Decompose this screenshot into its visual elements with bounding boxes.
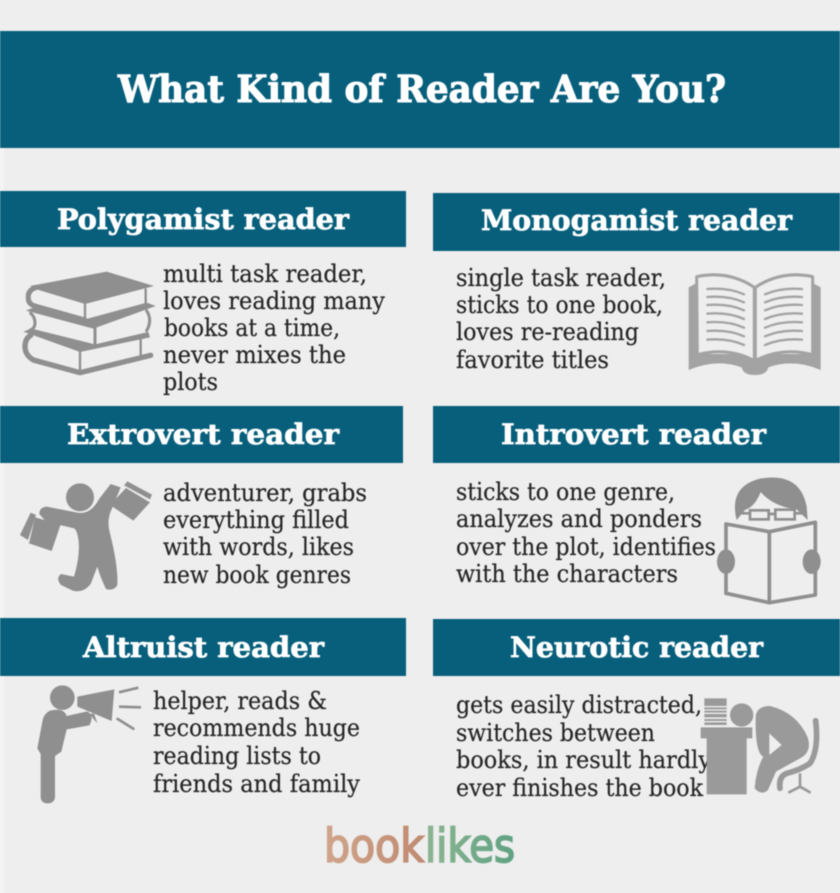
icon: person with megaphone	[37, 685, 141, 803]
text: neurotic description: ever finishes the book	[456, 773, 704, 802]
panel: extrovert reader	[0, 406, 403, 591]
text: monogamist description: single task reader,	[456, 263, 666, 292]
text: polygamist description	[163, 259, 385, 396]
text: polygamist description: multi task reader,	[163, 259, 367, 288]
text: monogamist description: favorite titles	[456, 345, 609, 374]
text: introvert description: sticks to one genre,	[456, 477, 675, 506]
text: introvert description: over the plot, identifies	[456, 532, 716, 561]
text: polygamist description: never mixes the	[163, 340, 346, 369]
text: neurotic description: switches between	[456, 718, 655, 747]
text: introvert description	[456, 477, 716, 588]
text: monogamist description: loves re-reading	[456, 317, 639, 346]
icon: person slumped at desk	[701, 698, 817, 794]
text: altruist description: friends and family	[153, 769, 360, 798]
text: altruist description	[153, 686, 360, 798]
text: polygamist description: plots	[163, 367, 218, 396]
text: introvert description: analyzes and ponders	[456, 504, 702, 533]
text: polygamist description: loves reading many	[163, 286, 385, 315]
icon: person with glasses reading	[717, 477, 821, 603]
text: monogamist description	[456, 263, 666, 374]
text: neurotic description: books, in result hardly	[456, 745, 711, 774]
logo: booklikes: book	[324, 819, 424, 873]
text: extrovert description	[163, 478, 367, 589]
text: extrovert description: with words, likes	[163, 532, 354, 561]
panel: polygamist reader	[0, 191, 406, 396]
heading: altruist reader: Altruist reader	[82, 631, 325, 664]
text: altruist description: helper, reads &	[153, 686, 327, 715]
text: extrovert description: new book genres	[163, 560, 351, 589]
panel: neurotic reader	[433, 619, 840, 802]
icon: open book	[689, 275, 821, 375]
text: extrovert description: adventurer, grabs	[163, 478, 367, 507]
text: altruist description: reading lists to	[153, 741, 321, 770]
icon: person jumping with books	[20, 481, 152, 591]
heading: introvert reader: Introvert reader	[501, 418, 767, 451]
panel: introvert reader	[433, 406, 840, 603]
panel: monogamist reader	[433, 193, 840, 375]
icon: stack of books	[23, 272, 156, 373]
text: neurotic description: gets easily distracted,	[456, 690, 702, 719]
heading: monogamist reader: Monogamist reader	[481, 204, 793, 237]
text: introvert description: with the characters	[456, 559, 678, 588]
heading: neurotic reader: Neurotic reader	[510, 631, 764, 664]
heading: polygamist reader: Polygamist reader	[57, 203, 350, 236]
heading: extrovert reader: Extrovert reader	[67, 418, 340, 451]
title: What Kind of Reader Are You?	[117, 67, 726, 111]
text: extrovert description: everything filled	[163, 505, 349, 534]
text: polygamist description: books at a time,	[164, 313, 340, 342]
text: neurotic description	[456, 690, 711, 802]
panel: altruist reader	[0, 618, 406, 803]
logo: booklikes	[324, 819, 515, 873]
text: altruist description: recommends huge	[153, 713, 360, 742]
text: monogamist description: sticks to one book,	[456, 290, 663, 319]
logo: booklikes: likes	[425, 819, 515, 873]
title banner	[0, 31, 840, 148]
